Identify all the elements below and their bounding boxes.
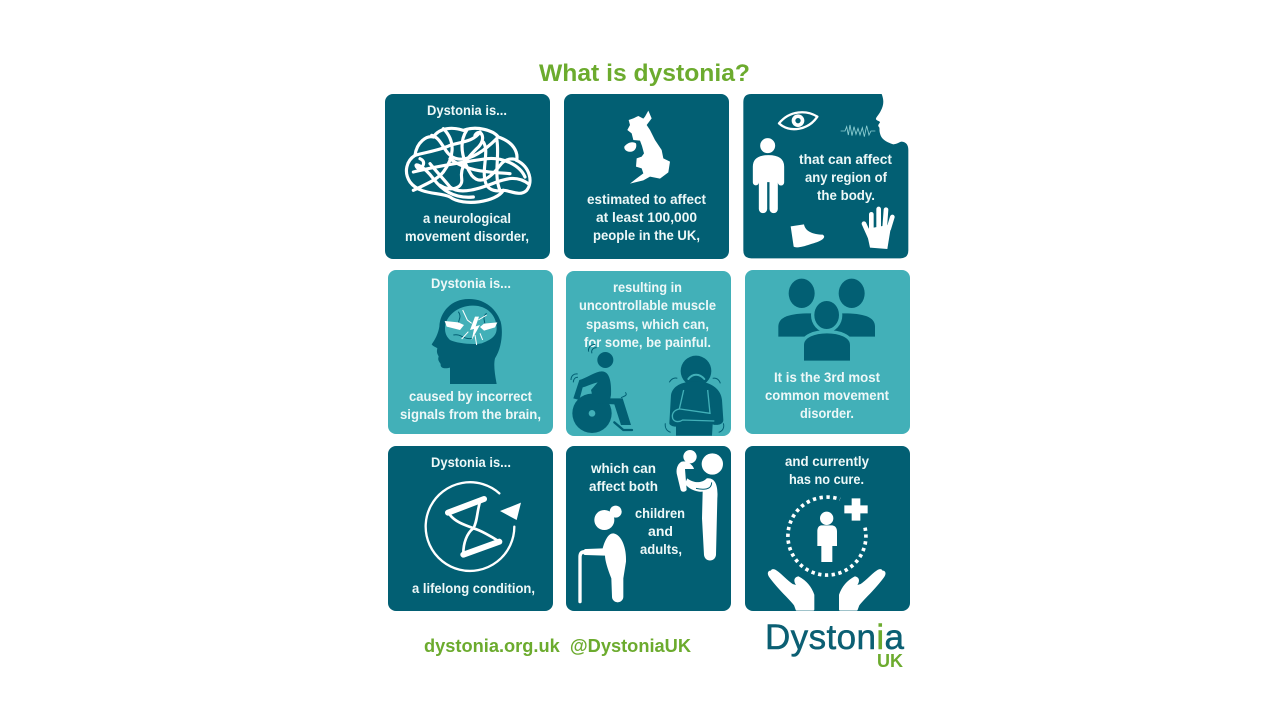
panel: incorrect brain signals xyxy=(388,270,553,434)
caption: children and adults: adults, xyxy=(640,542,682,557)
caption: 3rd most common: common movement xyxy=(765,388,889,403)
icon: person in pain xyxy=(665,356,724,436)
caption: uncontrollable muscle spasms: for some, be painful. xyxy=(584,335,711,350)
caption: estimated to affect: at least 100,000 xyxy=(596,210,697,225)
caption: children and adults: children xyxy=(635,506,685,521)
icon: voice wave xyxy=(841,125,875,137)
icon: tangled brain xyxy=(406,128,530,202)
caption: that can affect xyxy=(799,152,893,203)
footer: website and handle: dystonia.org.uk @DystoniaUK xyxy=(424,635,692,656)
caption: uncontrollable muscle spasms: uncontrollable muscle xyxy=(579,298,716,313)
icon: person in wheelchair xyxy=(571,344,632,433)
caption: which can affect both xyxy=(589,461,658,494)
caption: incorrect signals: signals from the brain, xyxy=(400,407,541,422)
caption: incorrect signals: caused by incorrect xyxy=(409,389,532,404)
caption: neurological movement disorder: movement disorder, xyxy=(405,229,529,244)
logo: Dystonia UK: UK xyxy=(877,650,904,671)
icon: older person with cane xyxy=(580,506,626,602)
panel: no cure xyxy=(745,446,910,611)
panel: children and adults xyxy=(566,446,731,611)
icon: hourglass in cycle xyxy=(426,482,521,571)
caption: estimated to affect xyxy=(587,192,707,243)
icon: eye xyxy=(779,112,817,129)
caption: lifelong condition: a lifelong condition, xyxy=(412,581,535,596)
caption: estimated to affect: people in the UK, xyxy=(593,228,700,243)
icon: adult lifting child xyxy=(677,450,723,560)
caption: estimated to affect: estimated to affect xyxy=(587,192,707,207)
caption: no cure: and currently xyxy=(785,454,869,469)
caption: 3rd most common xyxy=(765,370,889,421)
icon: head with brain signals xyxy=(432,299,502,384)
caption: which can affect both: which can xyxy=(590,461,656,476)
caption: uncontrollable muscle spasms xyxy=(579,280,716,350)
panel: muscle spasms xyxy=(566,271,731,436)
caption: uncontrollable muscle spasms: spasms, which can, xyxy=(586,317,709,332)
logo: Dystonia UK: Dystonia xyxy=(765,618,905,657)
title: What is dystonia? xyxy=(539,60,750,87)
heading: Dystonia is: Dystonia is... xyxy=(431,276,511,291)
icon: UK map xyxy=(624,111,670,184)
icon: foot xyxy=(791,224,824,247)
caption: no cure: has no cure. xyxy=(789,472,864,487)
caption: neurological movement disorder: a neurological xyxy=(423,211,511,226)
caption: children and adults xyxy=(635,506,685,557)
caption: that can affect: the body. xyxy=(817,188,875,203)
panel: any region of the body xyxy=(743,94,908,258)
icon: body figure xyxy=(753,139,784,213)
icon: person in dotted circle with plus and hands xyxy=(769,497,884,610)
caption: 3rd most common: disorder. xyxy=(800,406,854,421)
heading: Dystonia is: Dystonia is... xyxy=(431,455,511,470)
panel: UK prevalence xyxy=(564,94,729,259)
caption: neurological movement disorder xyxy=(405,211,529,244)
caption: which can affect both: affect both xyxy=(589,479,658,494)
caption: uncontrollable muscle spasms: resulting in xyxy=(613,280,682,295)
caption: no cure xyxy=(785,454,869,487)
caption: children and adults: and xyxy=(648,524,673,539)
caption: incorrect signals xyxy=(400,389,541,422)
heading: Dystonia is: Dystonia is... xyxy=(427,103,507,118)
caption: 3rd most common: It is the 3rd most xyxy=(774,370,880,385)
icon: hand xyxy=(864,209,892,249)
caption: that can affect: that can affect xyxy=(799,152,893,167)
icon: group of people xyxy=(778,279,875,362)
caption: that can affect: any region of xyxy=(805,170,887,185)
panel: lifelong condition xyxy=(388,446,553,611)
panel: neurological movement disorder xyxy=(385,94,550,259)
panel: third most common xyxy=(745,270,910,434)
